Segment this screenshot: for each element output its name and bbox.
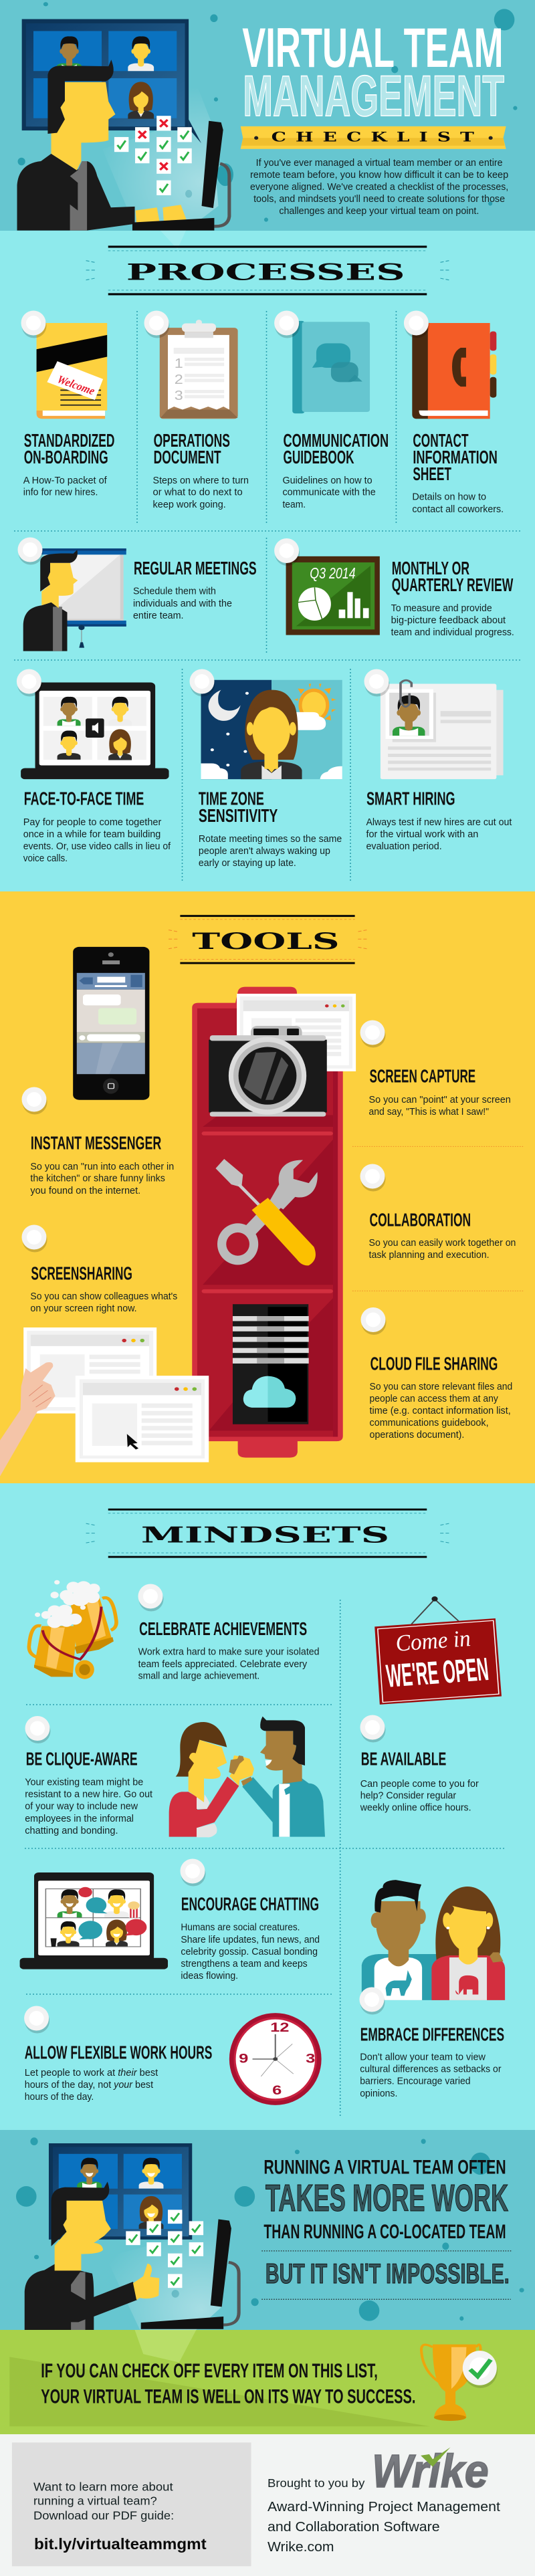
text: allow flexible work hours: hours of the day. xyxy=(25,2090,94,2102)
icon: wrike logo: Wrike xyxy=(372,2444,489,2497)
icon: screen capture window xyxy=(237,994,356,1071)
text: face-to-face time: once in a while for team building xyxy=(23,829,160,839)
text: cloud file sharing xyxy=(370,1353,512,1440)
monitor with video call panes xyxy=(22,19,201,143)
header illustration and title xyxy=(17,2,517,231)
screen light xyxy=(102,64,219,231)
laptop xyxy=(132,121,229,231)
text: encourage chatting: Humans are social creatures. xyxy=(181,1921,300,1933)
mindsets background xyxy=(0,1483,535,2130)
checklist boxes xyxy=(114,116,192,195)
heading: processes: PROCESSES xyxy=(126,259,405,286)
icon: operations clipboard: 2 xyxy=(175,371,183,387)
text: sponsor: and Collaboration Software xyxy=(268,2519,440,2534)
text: face-to-face time: voice calls. xyxy=(23,853,68,863)
icon: laptop with chatting team xyxy=(20,1872,168,1969)
text: communication guidebook description: team. xyxy=(282,499,306,510)
text: encourage chatting: strengthens a team and keeps xyxy=(181,1957,308,1969)
text: operations document description xyxy=(153,475,249,510)
text: instant messenger: the kitchen" or share funny links xyxy=(30,1173,165,1184)
monitor with smiling team xyxy=(49,2143,192,2240)
icon: wall clock: 12 xyxy=(270,2020,289,2034)
icon: open sign: Come in xyxy=(395,1626,472,1656)
text: collaboration xyxy=(369,1209,516,1261)
text: celebrate achievements: small and large achievement. xyxy=(138,1671,259,1681)
text: sponsor: Award-Winning Project Management xyxy=(268,2499,501,2514)
text: screen capture xyxy=(369,1066,511,1117)
icon: welcome book xyxy=(37,323,107,419)
icon: contact book xyxy=(412,323,496,419)
text: time zone sensitivity xyxy=(199,788,342,869)
text: encourage chatting xyxy=(181,1894,320,1981)
man giving thumbs up xyxy=(25,2181,159,2331)
icon: colleagues fist bump xyxy=(169,1717,325,1837)
icon: communication guidebook xyxy=(292,321,370,413)
text: time zone sensitivity: early or staying up late. xyxy=(199,857,296,869)
icon: cloud file xyxy=(233,1304,309,1424)
checklist boxes xyxy=(126,2210,203,2288)
panel: pdf guide: running a virtual team? xyxy=(33,2494,157,2508)
text: instant messenger: So you can "run into each other in xyxy=(30,1161,174,1172)
laptop xyxy=(141,2220,239,2329)
heading: mindsets xyxy=(86,1509,449,1558)
mindsets checkboxes xyxy=(24,1584,386,2033)
icon: open sign xyxy=(374,1596,502,1705)
text: standardized on-boarding heading: ON-BOARDING xyxy=(24,447,108,467)
tools lower content xyxy=(0,1304,512,1477)
intro paragraph xyxy=(250,158,508,217)
text: allow flexible work hours: hours of the day, not your best xyxy=(25,2078,153,2090)
text: monthly or quarterly review: big-picture feedback about xyxy=(391,615,506,626)
icon: operations clipboard: 3 xyxy=(175,388,183,403)
text: screensharing: So you can show colleagues what's xyxy=(30,1291,177,1302)
text: be available description: Can people come to you for xyxy=(360,1778,479,1789)
text: face-to-face time: events. Or, use video calls in lieu of xyxy=(23,841,171,852)
text: sponsor: Brought to you by xyxy=(268,2477,365,2490)
text: smart hiring: SMART HIRING xyxy=(366,788,455,809)
text: screen capture: and say, "This is what I saw!" xyxy=(369,1107,489,1117)
text: communication guidebook description xyxy=(282,475,376,510)
text: be clique-aware heading: BE CLIQUE-AWARE xyxy=(26,1748,138,1769)
icon: wall clock: 9 xyxy=(239,2052,248,2066)
text: cloud file sharing: people can access them at any xyxy=(370,1394,499,1404)
text: celebrate achievements: team feels appreciated. Celebrate every xyxy=(138,1658,308,1669)
text: cloud file sharing: communications guidebook, xyxy=(370,1417,489,1428)
icon: man and woman with party shirts xyxy=(362,1880,505,2000)
text: be clique-aware description xyxy=(25,1776,152,1836)
panel: pdf guide: Want to learn more about xyxy=(33,2481,173,2494)
icon: wall clock: 3 xyxy=(306,2052,315,2066)
panel: closing statement xyxy=(0,2130,535,2331)
text: communication guidebook heading: GUIDEBOOK xyxy=(283,447,354,467)
icon: trophy with check xyxy=(421,2345,498,2421)
lower rows of process items xyxy=(21,475,514,869)
heading: tools: TOOLS xyxy=(192,928,340,954)
mindsets upper content xyxy=(26,1509,502,1769)
text: operations document heading: OPERATIONS xyxy=(154,431,230,451)
text: be available description: help? Consider regular xyxy=(360,1790,456,1801)
closing content xyxy=(16,2137,524,2331)
tools background xyxy=(0,891,535,1483)
text: contact information description: contact all coworkers. xyxy=(412,504,504,514)
panel: mindsets xyxy=(0,1483,535,2130)
icon: operations clipboard: 1 xyxy=(175,355,183,371)
text: standardized on-boarding description: A How-To packet of xyxy=(23,475,107,486)
text: closing message xyxy=(261,2157,512,2299)
text: screensharing: on your screen right now. xyxy=(30,1303,137,1314)
text: communication guidebook description: communicate with the xyxy=(282,487,376,498)
text: regular meetings: individuals and with the xyxy=(133,598,232,609)
heading: tools xyxy=(169,915,366,964)
text: embrace differences xyxy=(360,2024,504,2099)
icon: smartphone messenger xyxy=(73,947,149,1100)
text: face-to-face time: Pay for people to come together xyxy=(23,817,162,828)
text: be available heading: BE AVAILABLE xyxy=(361,1748,446,1769)
panel: pdf guide xyxy=(12,2442,251,2566)
text: celebrate achievements: Work extra hard to make sure your isolated xyxy=(138,1646,320,1657)
text: time zone sensitivity: TIME ZONE xyxy=(199,788,264,809)
text: face-to-face time xyxy=(23,788,171,863)
decorative dots xyxy=(16,2137,524,2321)
icon: resume with paperclip xyxy=(381,680,504,779)
text: operations document description: keep work going. xyxy=(153,499,226,510)
icon: review chalkboard: Q3 2014 xyxy=(310,564,356,582)
text: celebrate achievements: CELEBRATE ACHIEVEMENTS xyxy=(139,1618,307,1639)
text: instant messenger: you found on the internet. xyxy=(30,1185,140,1196)
text: smart hiring: evaluation period. xyxy=(366,841,442,852)
text: communication guidebook description: Guidelines on how to xyxy=(282,475,372,486)
text: collaboration: task planning and execution. xyxy=(369,1250,490,1261)
text: standardized on-boarding heading xyxy=(24,431,114,467)
icon: camera xyxy=(209,1026,327,1117)
process checkboxes xyxy=(17,310,429,697)
text: standardized on-boarding description xyxy=(23,475,107,498)
icon: screensharing windows and hand xyxy=(0,1327,209,1477)
text: instant messenger xyxy=(30,1133,174,1196)
icon: red tool cabinet xyxy=(192,987,343,1458)
text: regular meetings: entire team. xyxy=(133,611,183,621)
text: allow flexible work hours: Let people to work at their best xyxy=(25,2066,158,2078)
tools checkboxes xyxy=(21,1021,387,1335)
panel: footer xyxy=(0,2434,535,2576)
text: communication guidebook heading xyxy=(283,431,389,467)
closing background xyxy=(0,2130,535,2330)
text: smart hiring xyxy=(366,788,512,852)
text: be available description: weekly online office hours. xyxy=(360,1802,471,1813)
text: embrace differences: barriers. Encourage varied xyxy=(360,2075,471,2086)
title xyxy=(242,17,504,128)
panel: processes xyxy=(0,231,535,891)
text: be clique-aware description: resistant to a new hire. Go out xyxy=(25,1788,152,1800)
icon: presenter at projector screen xyxy=(23,548,126,651)
icon: welcome book: Welcome xyxy=(56,373,97,397)
text: encourage chatting: ideas flowing. xyxy=(181,1969,238,1981)
text: operations document description: or what to do next to xyxy=(153,487,243,498)
man at desk xyxy=(17,60,187,231)
text: time zone sensitivity: Rotate meeting times so the same xyxy=(199,833,342,844)
panel: header xyxy=(0,0,535,231)
text: regular meetings: Schedule them with xyxy=(133,586,216,597)
mindsets dividers xyxy=(25,1600,504,2116)
intro paragraph: challenges and keep your virtual team on point. xyxy=(279,206,479,217)
icon: beer mugs and medal xyxy=(29,1580,116,1679)
panel: pdf guide: bit.ly/virtualteammgmt xyxy=(34,2535,207,2553)
decorative dots xyxy=(18,2,517,222)
text: communication guidebook heading: COMMUNICATION xyxy=(283,431,389,451)
text: time zone sensitivity: SENSITIVITY xyxy=(199,805,278,826)
text: regular meetings xyxy=(133,558,257,621)
text: be clique-aware description: Your existing team might be xyxy=(25,1776,143,1788)
processes dividers xyxy=(14,311,521,881)
panel: success banner xyxy=(0,2330,535,2434)
text: be clique-aware description: chatting and bonding. xyxy=(25,1824,118,1836)
checklist banner xyxy=(241,126,506,149)
text: be available description xyxy=(360,1778,479,1813)
processes background xyxy=(0,231,535,891)
text: celebrate achievements xyxy=(138,1618,320,1681)
text: contact information sheet heading: CONTACT xyxy=(413,431,469,451)
icon: review chalkboard xyxy=(286,556,380,635)
text: face-to-face time: FACE-TO-FACE TIME xyxy=(24,788,144,809)
text: success message xyxy=(41,2360,415,2408)
icon: wall clock: 6 xyxy=(272,2083,282,2097)
text: screensharing xyxy=(30,1263,177,1314)
text: time zone sensitivity: people aren't always waking up xyxy=(199,846,330,857)
footer background xyxy=(0,2434,535,2576)
text: be clique-aware description: of your way to include new xyxy=(25,1800,138,1812)
mindsets lower content: ALLOW FLEXIBLE WORK HOURS xyxy=(25,2042,212,2063)
text: cloud file sharing: operations document). xyxy=(370,1430,464,1440)
heading: processes xyxy=(86,245,449,295)
text: operations document description: Steps on where to turn xyxy=(153,475,249,486)
text: smart hiring: for the virtual work with an xyxy=(366,829,478,839)
text: monthly or quarterly review xyxy=(391,558,514,638)
text: encourage chatting: celebrity gossip. Casual bonding xyxy=(181,1945,318,1957)
mindsets lower content: ENCOURAGE CHATTING xyxy=(181,1894,319,1915)
icon: wrench and screwdriver xyxy=(215,1159,318,1265)
icon: day and night woman xyxy=(201,680,342,779)
panel: pdf guide: Download our PDF guide: xyxy=(33,2509,174,2523)
text: contact information description: Details on how to xyxy=(412,492,486,502)
icon: wall clock xyxy=(229,2013,322,2105)
text: operations document heading xyxy=(154,431,230,467)
text: regular meetings: REGULAR MEETINGS xyxy=(134,558,257,578)
panel: tools xyxy=(0,891,535,1483)
text: standardized on-boarding heading: STANDARDIZED xyxy=(24,431,114,451)
text: encourage chatting: Share life updates, fun news, and xyxy=(181,1933,320,1945)
text: sponsor: Wrike.com xyxy=(268,2539,334,2554)
banner content xyxy=(9,2330,498,2426)
text: instant messenger: INSTANT MESSENGER xyxy=(31,1133,161,1154)
text: embrace differences: Don't allow your team to view xyxy=(360,2051,486,2062)
screen light xyxy=(106,2151,222,2330)
text: allow flexible work hours xyxy=(25,2042,212,2102)
text: contact information sheet heading xyxy=(413,431,498,484)
heading: mindsets: MINDSETS xyxy=(141,1522,389,1548)
tools upper content xyxy=(30,915,524,1458)
icon: video call laptop xyxy=(21,682,169,779)
text: screensharing: SCREENSHARING xyxy=(31,1263,132,1284)
text: monthly or quarterly review: To measure and provide xyxy=(391,603,492,614)
text: standardized on-boarding description: info for new hires. xyxy=(23,487,98,498)
text: contact information description xyxy=(412,492,504,514)
text: be clique-aware description: employees in the informal xyxy=(25,1812,134,1824)
text: operations document heading: DOCUMENT xyxy=(154,447,221,467)
top row of process items xyxy=(24,231,498,484)
footer content xyxy=(12,2442,501,2566)
checklist banner: CHECKLIST xyxy=(272,129,484,144)
text: contact information sheet heading: SHEET xyxy=(413,464,451,484)
icon: operations clipboard xyxy=(160,320,238,419)
header background xyxy=(0,0,535,231)
text: sponsor xyxy=(268,2477,501,2554)
text: embrace differences: opinions. xyxy=(360,2087,397,2099)
banner background xyxy=(0,2330,535,2434)
mindsets lower content xyxy=(20,1776,505,2105)
